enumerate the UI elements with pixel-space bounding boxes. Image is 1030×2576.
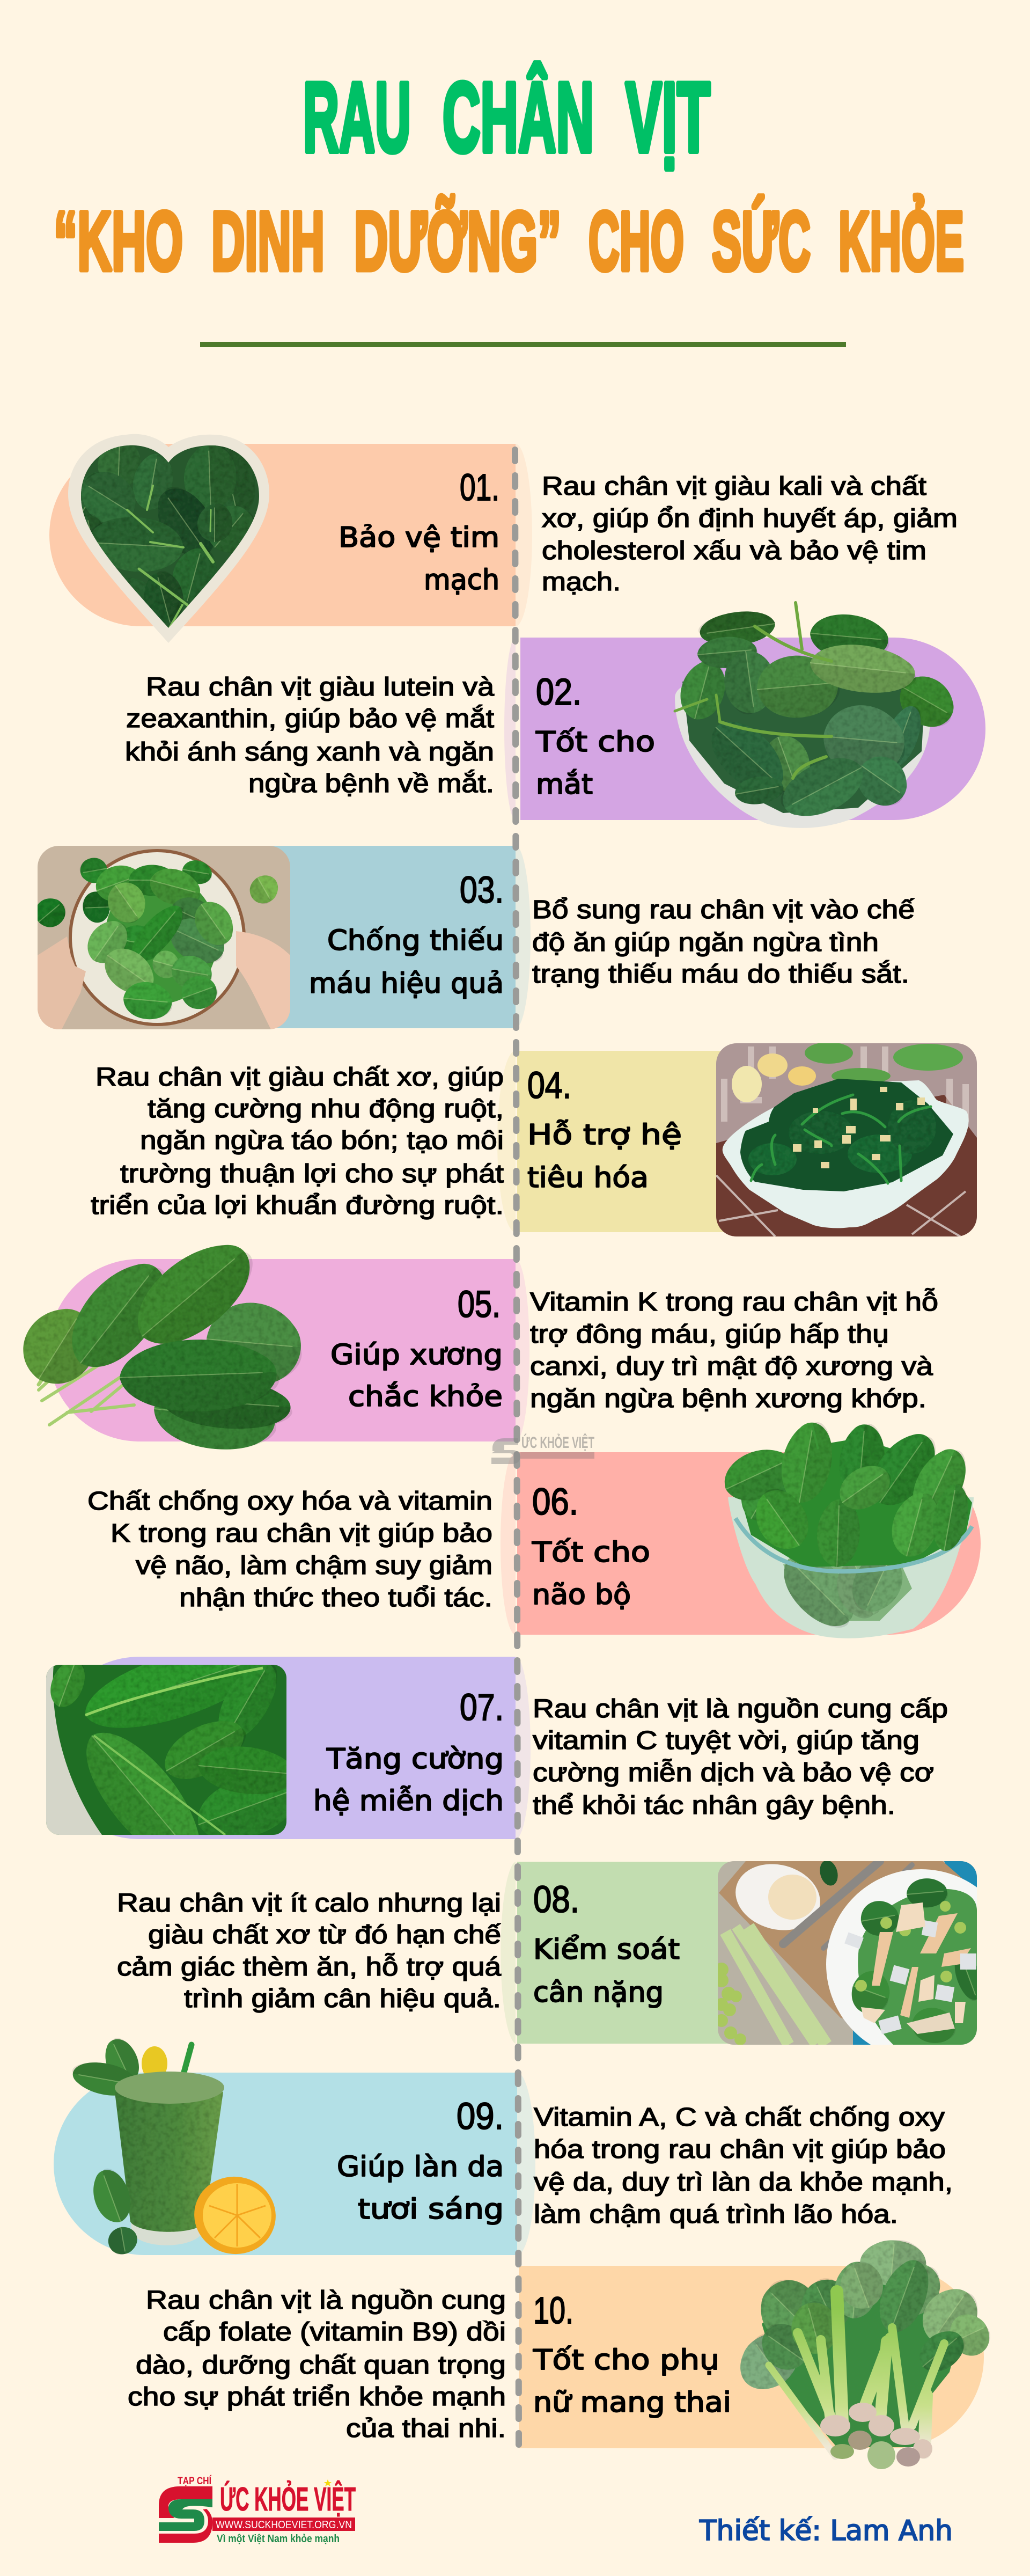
description <box>532 896 915 989</box>
title line 2: CHO <box>588 195 684 288</box>
description <box>117 1889 501 2013</box>
heading <box>309 925 504 1000</box>
description: dào, dưỡng chất quan trọng <box>136 2351 506 2380</box>
number: 09. <box>457 2095 504 2137</box>
heading: tiêu hóa <box>527 1162 649 1194</box>
heading: Tốt cho phụ <box>533 2344 719 2376</box>
heading <box>339 522 499 596</box>
image: plate of spinach held by hands <box>30 846 290 1029</box>
number: 10. <box>533 2289 573 2331</box>
heading: cân nặng <box>533 1977 664 2009</box>
image: close-up spinach <box>46 1665 286 1835</box>
description: nhận thức theo tuổi tác. <box>179 1584 492 1612</box>
description <box>125 673 494 798</box>
image: spinach leaves <box>10 1224 306 1455</box>
heading: Giúp xương <box>330 1339 503 1371</box>
logo url bar <box>212 2518 355 2531</box>
logo <box>159 2475 356 2545</box>
description: Rau chân vịt giàu kali và chất <box>542 472 926 501</box>
description <box>530 1287 938 1413</box>
heading: Giúp làn da <box>337 2151 504 2183</box>
description: thể khỏi tác nhân gây bệnh. <box>533 1791 895 1820</box>
description: Rau chân vịt giàu lutein và <box>146 673 494 701</box>
description: làm chậm quá trình lão hóa. <box>534 2200 898 2229</box>
heading: mạch <box>424 564 499 596</box>
heading <box>533 2344 731 2419</box>
panel shape <box>48 1259 516 1441</box>
heading: Chống thiếu <box>327 925 504 957</box>
panel shape <box>215 846 516 1028</box>
dashed centre timeline <box>515 450 519 2445</box>
panel 01: heart <box>49 434 958 643</box>
panel shape <box>54 2073 517 2255</box>
description: ngăn ngừa táo bón; tạo môi <box>140 1126 504 1155</box>
panel shape <box>520 638 985 820</box>
panel 05: spinach leaves <box>10 1224 938 1455</box>
number: 07. <box>460 1686 504 1728</box>
image: spinach heart <box>65 434 269 643</box>
heading <box>527 1119 682 1194</box>
description: độ ăn giúp ngăn ngừa tình <box>532 928 879 957</box>
heading: Tốt cho <box>532 1536 650 1569</box>
heading: tươi sáng <box>358 2193 504 2226</box>
watermark <box>491 1433 594 1464</box>
image: green smoothie with lemon <box>69 2033 282 2260</box>
number: 02. <box>536 671 582 713</box>
title line 2 <box>54 195 964 288</box>
description: tăng cường nhu động ruột, <box>148 1095 504 1123</box>
heading: Tăng cường <box>326 1743 504 1775</box>
panel 07: washed leaves <box>46 1657 947 1839</box>
description <box>87 1487 492 1612</box>
description <box>533 1695 948 1820</box>
logo tagline: Vì một Việt Nam khỏe mạnh <box>217 2533 340 2545</box>
description: triển của lợi khuẩn đường ruột. <box>91 1191 504 1220</box>
panel shape <box>517 1862 805 2044</box>
image: spinach bunch <box>729 2237 996 2469</box>
description: Vitamin A, C và chất chống oxy <box>534 2103 945 2132</box>
image: salad on wooden board <box>715 1855 1016 2059</box>
heading <box>337 2151 504 2226</box>
heading: máu hiệu quả <box>309 968 504 1000</box>
description <box>534 2103 953 2229</box>
image: white bowl of spinach <box>674 603 964 830</box>
description: cường miễn dịch và bảo vệ cơ <box>533 1758 934 1787</box>
logo mark <box>159 2486 212 2543</box>
title line 1: VỊT <box>626 62 710 172</box>
logo url: WWW.SUCKHOEVIET.ORG.VN <box>216 2519 352 2531</box>
description: cholesterol xấu và bảo vệ tim <box>542 537 926 565</box>
description: canxi, duy trì mật độ xương và <box>530 1352 933 1381</box>
description: Chất chống oxy hóa và vitamin <box>87 1487 492 1516</box>
title line 1: CHÂN <box>443 62 594 172</box>
panel shape <box>519 2266 984 2448</box>
title line 1 <box>303 62 710 172</box>
description: ngừa bệnh về mắt. <box>248 769 494 798</box>
number: 03. <box>460 869 504 911</box>
description: vệ da, duy trì làn da khỏe mạnh, <box>534 2168 953 2197</box>
number: 04. <box>527 1064 571 1106</box>
description: Rau chân vịt giàu chất xơ, giúp <box>95 1063 504 1092</box>
panel 04: sauteed spinach <box>91 1042 977 1236</box>
watermark: ỨC KHỎE VIỆT <box>521 1433 594 1452</box>
panel shape <box>48 1657 516 1839</box>
heading <box>535 726 655 801</box>
description: Vitamin K trong rau chân vịt hỗ <box>530 1287 938 1316</box>
description: mạch. <box>542 568 621 596</box>
panel 06: glass bowl <box>87 1417 981 1640</box>
panel shape <box>517 1452 981 1635</box>
description: hóa trong rau chân vịt giúp bảo <box>534 2135 946 2164</box>
panel shape <box>517 1051 805 1232</box>
description: khỏi ánh sáng xanh và ngăn <box>125 738 494 766</box>
description: cấp folate (vitamin B9) dồi <box>163 2318 506 2346</box>
logo star <box>324 2479 332 2486</box>
description <box>128 2286 506 2443</box>
description: Rau chân vịt là nguồn cung cấp <box>533 1695 948 1723</box>
description: vệ não, làm chậm suy giảm <box>136 1552 492 1580</box>
logo name: ỨC KHỎE VIỆT <box>220 2481 356 2518</box>
title line 2: “KHO <box>54 195 183 288</box>
heading <box>532 1536 650 1611</box>
number: 08. <box>533 1878 579 1920</box>
description: trạng thiếu máu do thiếu sắt. <box>532 960 909 989</box>
heading: hệ miễn dịch <box>313 1785 504 1817</box>
description: cảm giác thèm ăn, hỗ trợ quá <box>117 1952 501 1981</box>
number: 05. <box>458 1283 501 1325</box>
panel 02: bowl <box>125 603 985 830</box>
title line 2: DƯỠNG” <box>354 195 561 288</box>
description: của thai nhi. <box>346 2414 506 2443</box>
left hand <box>38 936 86 1029</box>
heading: chắc khỏe <box>348 1381 503 1413</box>
title line 2: SỨC <box>712 195 811 288</box>
designer credit: Thiết kế: Lam Anh <box>699 2515 953 2547</box>
heading <box>330 1339 503 1413</box>
heading: Kiểm soát <box>533 1934 680 1966</box>
number: 06. <box>532 1481 578 1523</box>
panel 10: spinach bunch <box>128 2237 996 2469</box>
heading <box>533 1934 680 2009</box>
logo eyebrow: TẠP CHÍ <box>178 2475 212 2487</box>
number: 01. <box>460 466 499 508</box>
heading <box>313 1743 504 1817</box>
description: trợ đông máu, giúp hấp thụ <box>530 1320 889 1349</box>
description: Bổ sung rau chân vịt vào chế <box>532 896 915 924</box>
panel 03: plate <box>30 846 915 1029</box>
title line 2: DINH <box>211 195 325 288</box>
description: trường thuận lợi cho sự phát <box>120 1160 504 1188</box>
description: K trong rau chân vịt giúp bảo <box>111 1519 492 1548</box>
image: sauteed spinach in white bowl <box>716 1042 977 1236</box>
description: xơ, giúp ổn định huyết áp, giảm <box>542 504 958 533</box>
heading: Hỗ trợ hệ <box>527 1119 682 1151</box>
panel 08: salad <box>117 1855 1016 2059</box>
image: glass bowl of spinach <box>716 1417 976 1640</box>
description: cho sự phát triển khỏe mạnh <box>128 2383 506 2411</box>
right hand <box>236 931 290 1029</box>
title line 1: RAU <box>303 62 411 172</box>
heading: não bộ <box>532 1579 631 1611</box>
panel 09: smoothie <box>54 2033 953 2260</box>
panel shape <box>49 444 516 626</box>
description: zeaxanthin, giúp bảo vệ mắt <box>126 704 494 733</box>
description: vitamin C tuyệt vời, giúp tăng <box>533 1726 919 1755</box>
title <box>54 62 964 288</box>
description: giàu chất xơ từ đó hạn chế <box>148 1921 501 1949</box>
heading: Tốt cho <box>535 726 655 758</box>
description: Rau chân vịt là nguồn cung <box>146 2286 506 2315</box>
description <box>91 1063 504 1220</box>
description <box>542 472 958 596</box>
description: ngăn ngừa bệnh xương khớp. <box>530 1385 926 1413</box>
description: Rau chân vịt ít calo nhưng lại <box>117 1889 501 1918</box>
heading: Bảo vệ tim <box>339 522 499 554</box>
heading: mắt <box>536 769 593 801</box>
description: trình giảm cân hiệu quả. <box>184 1985 501 2013</box>
heading: nữ mang thai <box>533 2387 731 2419</box>
